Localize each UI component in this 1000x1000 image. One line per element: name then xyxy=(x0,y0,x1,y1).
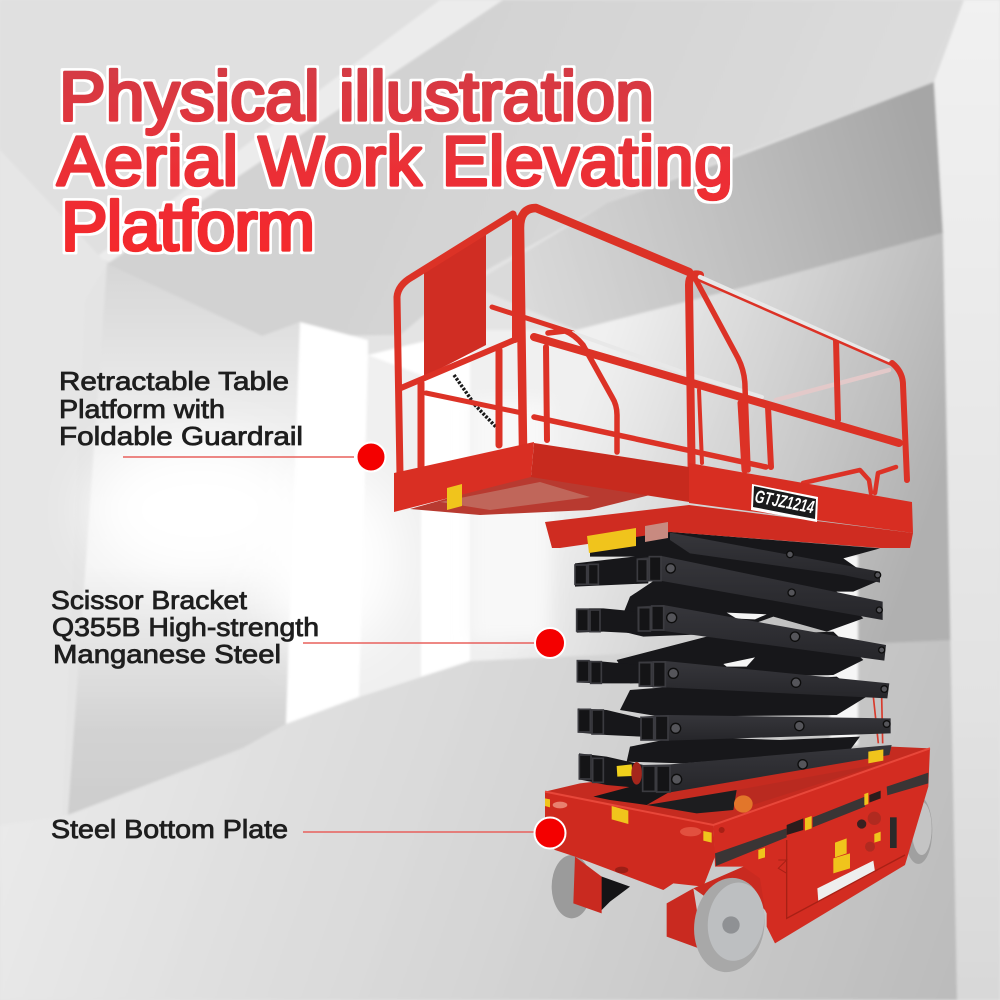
scissor lift machine xyxy=(394,208,932,977)
callout: guardrail xyxy=(59,366,386,472)
beacon light xyxy=(734,795,753,813)
title xyxy=(57,57,733,265)
base chassis xyxy=(545,748,930,950)
wheel arch xyxy=(693,867,765,910)
forks xyxy=(573,857,602,913)
crossing arms behind xyxy=(590,532,880,592)
title: Platform xyxy=(61,187,315,265)
front wheel xyxy=(688,873,771,977)
wheels behind chassis xyxy=(552,796,932,918)
side face xyxy=(713,748,930,943)
back guardrail xyxy=(492,280,896,493)
label text xyxy=(51,585,319,669)
scissor arm stack xyxy=(575,532,892,792)
chassis top tray xyxy=(545,747,930,825)
front face xyxy=(689,463,913,533)
door panel xyxy=(787,840,905,918)
label text: Manganese Steel xyxy=(53,639,281,669)
label text: Q355B High-strength xyxy=(52,612,319,642)
callout: scissor bracket xyxy=(51,585,565,669)
beam top xyxy=(670,533,880,583)
model badge xyxy=(751,484,818,522)
front guardrail xyxy=(397,208,907,495)
label text xyxy=(59,366,303,451)
end face xyxy=(394,442,534,512)
lower scissor deck xyxy=(545,505,913,548)
front face xyxy=(545,792,715,890)
controls xyxy=(857,819,866,829)
label text: Scissor Bracket xyxy=(51,585,248,615)
beam 2 xyxy=(637,605,886,661)
beam 1 xyxy=(637,556,883,620)
beam 3 xyxy=(639,661,889,698)
title: Physical illustration xyxy=(59,57,654,135)
access gate and wire xyxy=(424,232,496,427)
hoist strap xyxy=(873,697,883,743)
label text: Steel Bottom Plate xyxy=(51,814,288,844)
left arm ends xyxy=(575,555,648,587)
label text: Platform with xyxy=(59,394,225,424)
side face xyxy=(531,443,689,502)
warning labels xyxy=(612,806,628,824)
title: Aerial Work Elevating xyxy=(57,122,733,200)
underside xyxy=(410,475,650,515)
slots xyxy=(553,802,567,808)
beam 4 xyxy=(641,715,891,741)
hydraulic collar xyxy=(617,764,633,777)
bolts xyxy=(666,551,890,784)
platform deck xyxy=(394,442,913,553)
label text: Foldable Guardrail xyxy=(59,421,303,451)
callout: bottom plate xyxy=(51,814,566,848)
beam 5 xyxy=(642,745,892,792)
top rim xyxy=(545,748,930,825)
bumper strips xyxy=(715,828,787,866)
model badge: GTJZ1214 xyxy=(753,486,816,517)
label text: Retractable Table xyxy=(59,366,289,396)
beam end boxes xyxy=(575,557,670,792)
